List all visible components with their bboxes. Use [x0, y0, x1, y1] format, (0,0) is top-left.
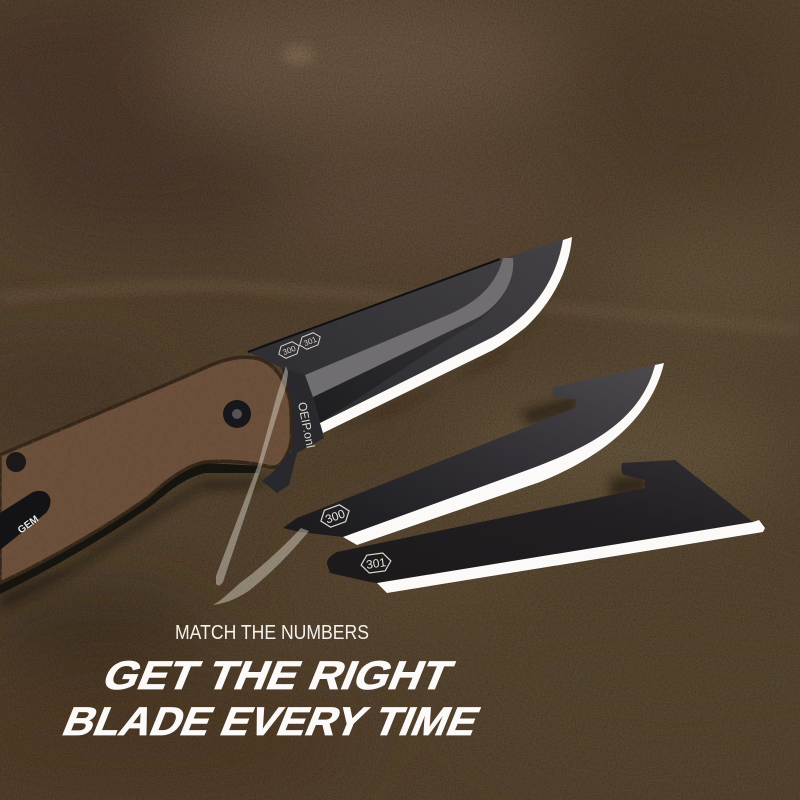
hex badge 300 on main blade [276, 340, 302, 360]
bolster engraved text: OEIP.onl [295, 401, 318, 449]
main blade white edge [320, 237, 572, 433]
subheading: MATCH THE NUMBERS [175, 622, 369, 644]
headline [57, 652, 487, 744]
blade dark lower strip [313, 280, 510, 423]
handle black liner [0, 463, 262, 594]
handle pocket clip: GEM [16, 514, 41, 536]
blade 300 white edge [343, 363, 664, 545]
main blade body [248, 239, 563, 423]
bolster and flipper [262, 358, 324, 493]
blade 301 white edge [377, 520, 765, 593]
shadows beneath knife and blades [0, 290, 648, 610]
hex badge 300 [318, 502, 352, 530]
blade 301 body [327, 460, 753, 583]
blade spine line [248, 259, 500, 352]
handle scale [0, 357, 292, 583]
handle pocket clip [0, 491, 50, 550]
handle screw, large [223, 400, 251, 428]
knife with brown textured handle [0, 237, 572, 594]
hex badge 300 on main blade: 300 [281, 344, 298, 357]
hex badge 301 [360, 552, 392, 574]
hex badge 301: 301 [365, 555, 387, 572]
translucent scribble stroke [213, 366, 309, 605]
blade 300 body [283, 365, 655, 537]
hex badge 301 on main blade [297, 331, 323, 351]
headline line one: GET THE RIGHT [97, 652, 460, 698]
headline line two: BLADE EVERY TIME [57, 698, 487, 744]
blade lighter bevel [305, 258, 513, 397]
replacement blade 300 [283, 363, 664, 545]
handle screw, small [6, 452, 26, 472]
hex badge 300: 300 [323, 506, 347, 526]
handle leather texture [0, 357, 292, 583]
cloth fold highlight [0, 286, 800, 330]
replacement blade 301 [327, 460, 765, 593]
hex badge 301 on main blade: 301 [302, 335, 319, 348]
